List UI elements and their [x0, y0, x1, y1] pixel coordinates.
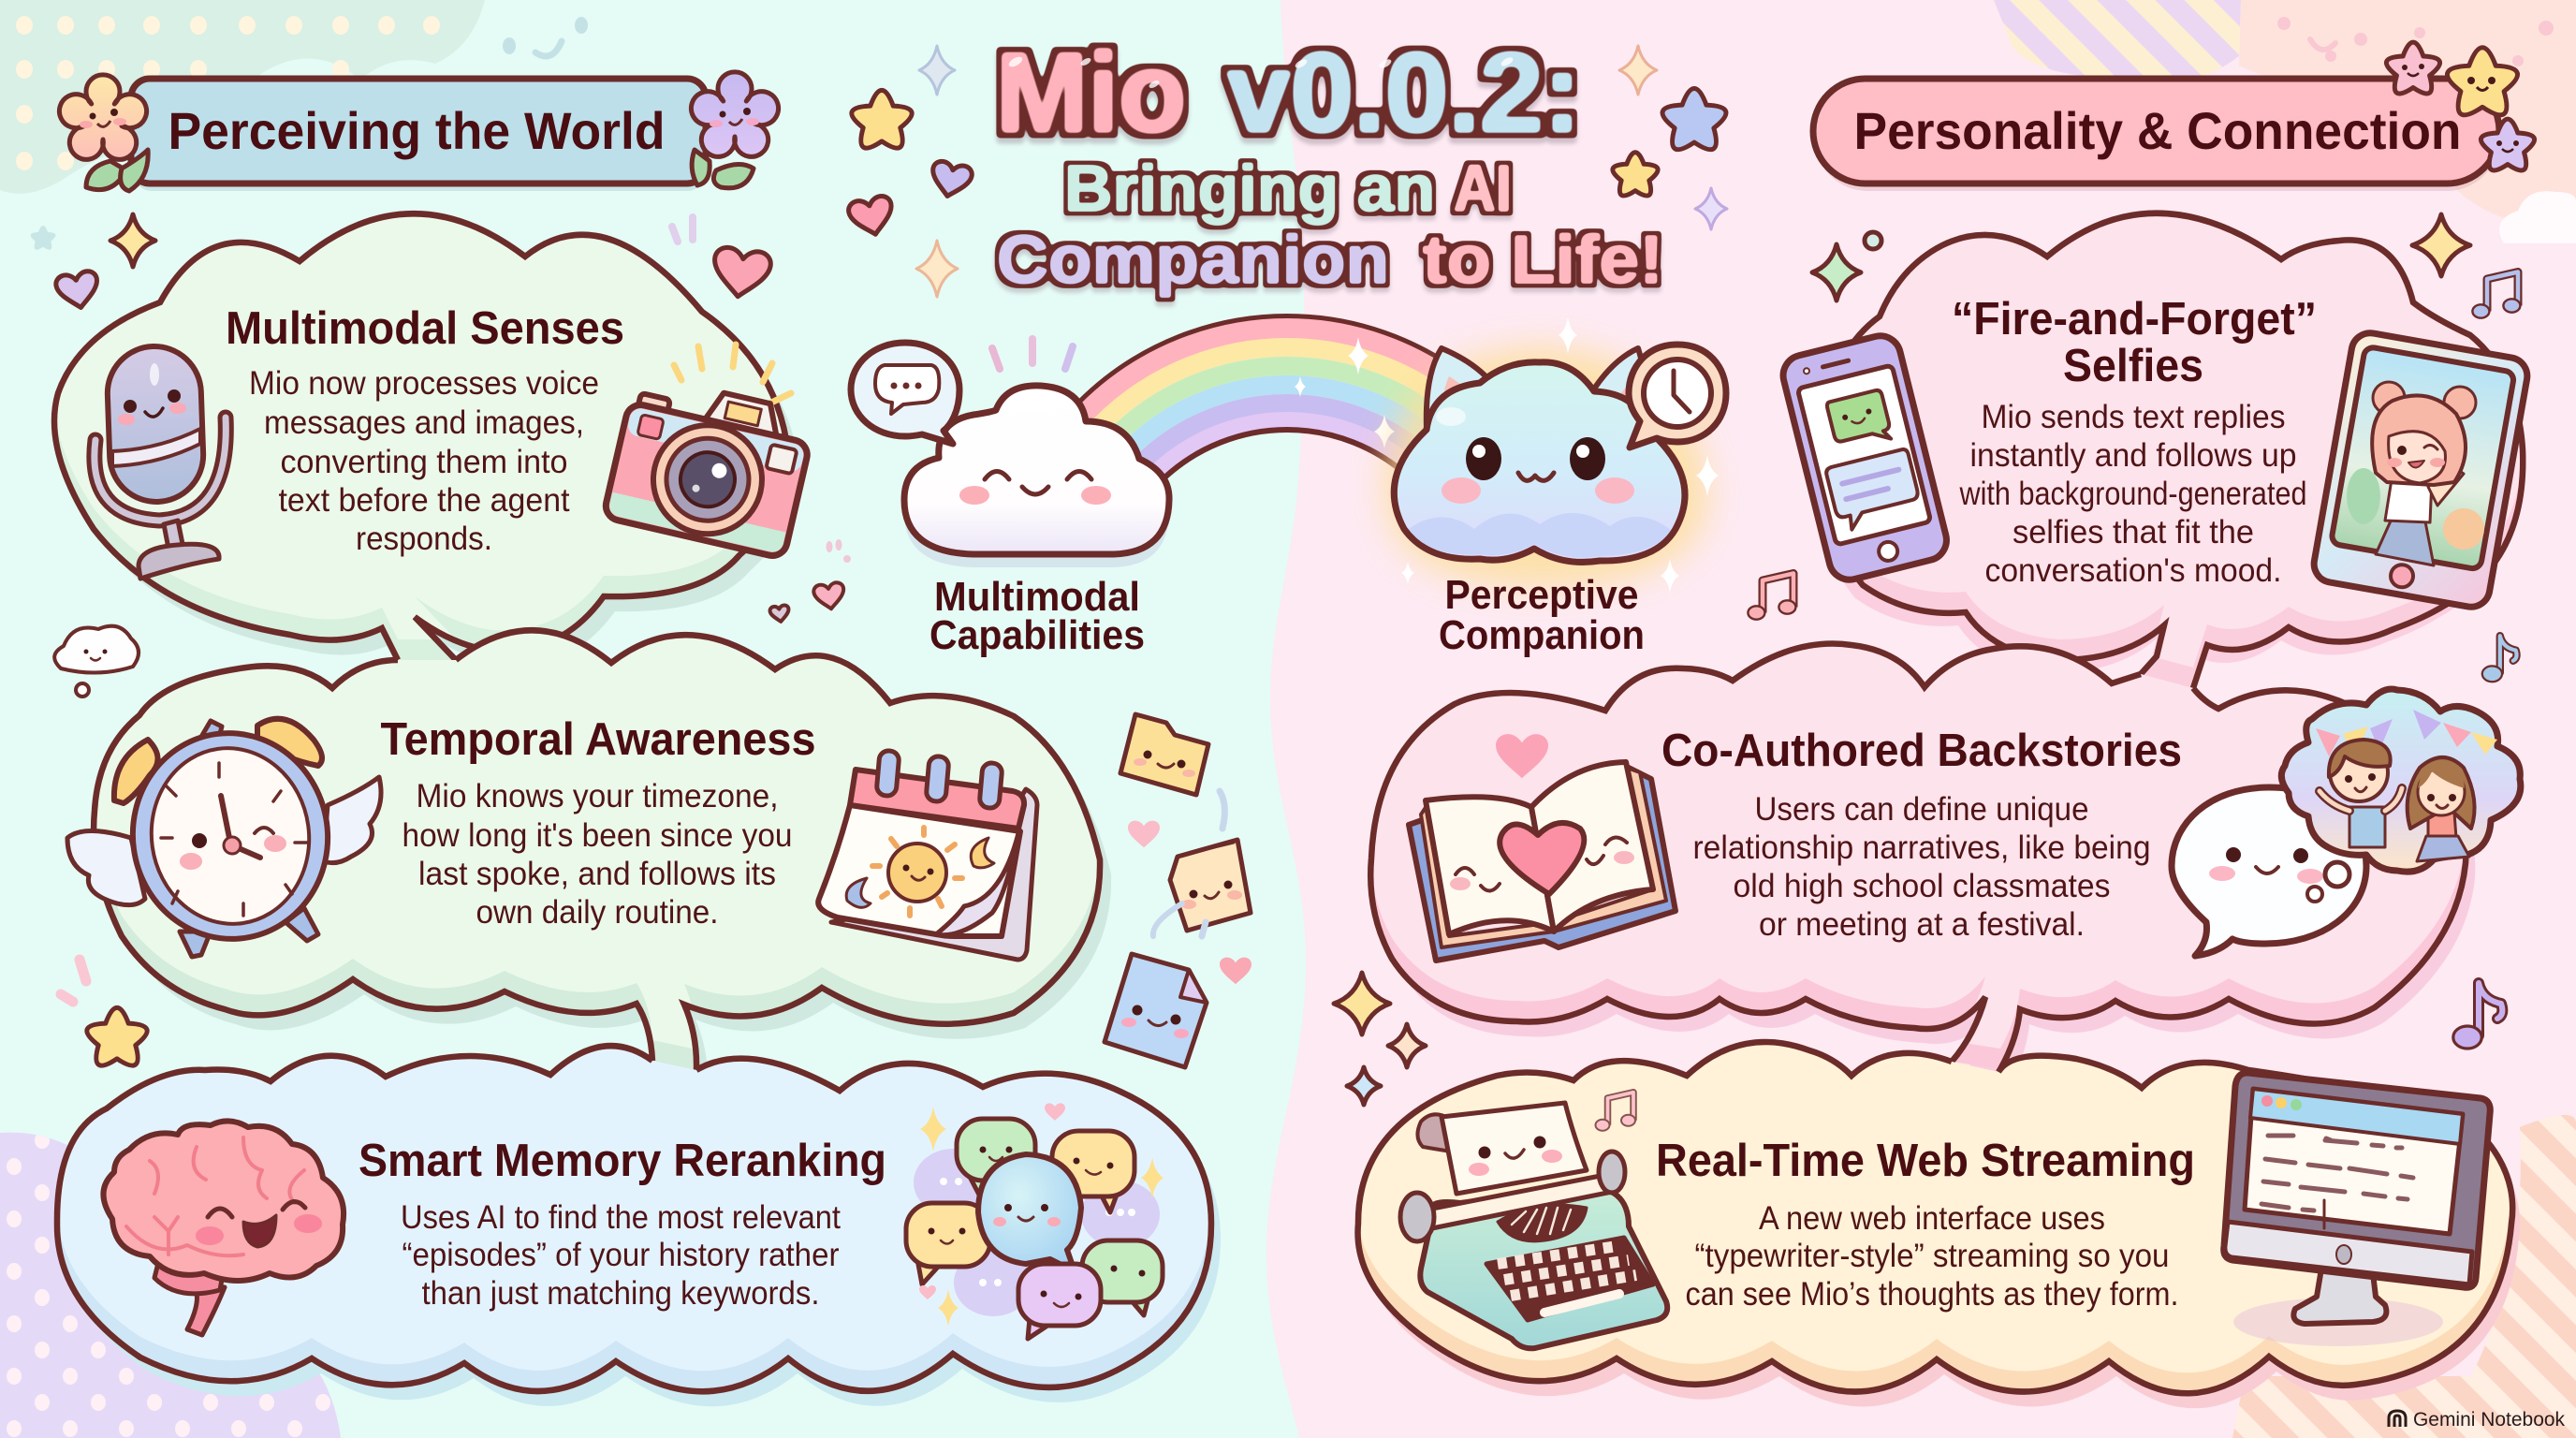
- body text: than just matching keywords.: [421, 1275, 820, 1312]
- title: Mio v0.0.2: Mio: [996, 30, 1186, 155]
- body text: “episodes” of your history rather: [402, 1237, 840, 1273]
- icon: pink star: [2386, 42, 2440, 94]
- decorations: left side: [31, 214, 851, 1065]
- body text: “typewriter-style” streaming so you: [1694, 1238, 2170, 1274]
- header: Perceiving the World: Perceiving the World: [168, 101, 665, 160]
- label: Multimodal Capabilities: Capabilities: [929, 612, 1145, 658]
- title: subtitle lines: Bringing an: [1064, 152, 1435, 225]
- bubble shape: [54, 193, 798, 675]
- bubble shape: [1813, 193, 2523, 701]
- label: Perceptive Companion: Perceptive: [1445, 572, 1638, 618]
- icon: calendar: [818, 750, 1037, 960]
- panel: Co-Authored Backstories: [1370, 624, 2521, 1084]
- header: Perceiving the World: [59, 72, 779, 191]
- icon: yellow folder: [1120, 714, 1208, 795]
- icon: camera: [603, 345, 817, 559]
- body text: [401, 1199, 841, 1312]
- icon: microphone: [95, 345, 226, 579]
- title: Mio v0.0.2: v0.0.2:: [1227, 30, 1581, 155]
- icon: festival thought cloud: [2281, 689, 2521, 872]
- body text: relationship narratives, like being: [1692, 829, 2151, 866]
- panel: Multimodal Senses: [54, 193, 817, 675]
- icon: open storybook: [1409, 734, 1676, 961]
- background blob: bottom left dots: [0, 1133, 341, 1438]
- heading: Temporal Awareness: [380, 714, 816, 765]
- heading: Real-Time Web Streaming: [1656, 1136, 2195, 1186]
- body text: own daily routine.: [476, 894, 719, 931]
- icon: brain: [103, 1121, 344, 1335]
- header: Personality & Connection: [1813, 42, 2535, 191]
- body text: how long it's been since you: [402, 817, 792, 854]
- icon: peach folder: [1170, 840, 1251, 931]
- panel: Temporal Awareness: [67, 609, 1111, 1085]
- title: subtitle lines: Companion: [997, 223, 1389, 298]
- icon: chat bubble cluster: [906, 1103, 1164, 1339]
- icon: clock bubble: [1629, 345, 1726, 448]
- body text: instantly and follows up: [1969, 437, 2297, 474]
- heading: Smart Memory Reranking: [359, 1136, 886, 1186]
- decorations: title stars and hearts: [847, 46, 1727, 297]
- title: subtitle lines: [997, 152, 1663, 298]
- body text: [1959, 399, 2306, 589]
- watermark: Gemini Notebook: Gemini Notebook: [2413, 1409, 2565, 1431]
- icon: right flower: [691, 72, 779, 188]
- background blob: top left dots: [0, 0, 485, 194]
- body text: or meeting at a festival.: [1759, 906, 2085, 943]
- rainbow sparkles: [1295, 337, 1395, 448]
- panel: Smart Memory Reranking: [57, 1025, 1221, 1406]
- label: Multimodal Capabilities: [929, 574, 1145, 658]
- body text: conversation's mood.: [1984, 552, 2282, 589]
- body text: [249, 365, 599, 557]
- heading: Multimodal Senses: [226, 303, 624, 354]
- icon: white speech bubble: [2172, 787, 2366, 956]
- title: Mio v0.0.2: [996, 30, 1581, 155]
- emphasis dashes: [992, 339, 1073, 369]
- icon: lavender star: [2481, 119, 2535, 170]
- body text: old high school classmates: [1734, 868, 2110, 904]
- body text: converting them into: [281, 444, 567, 480]
- body text: Mio sends text replies: [1981, 399, 2286, 435]
- icon: tablet with selfie: [2311, 330, 2530, 609]
- body text: [1692, 791, 2151, 943]
- decorations: right side sparkles and notes: [1334, 214, 2520, 1105]
- body text: with background-generated: [1959, 476, 2306, 512]
- body text: A new web interface uses: [1759, 1200, 2105, 1237]
- body text: Mio now processes voice: [249, 365, 599, 402]
- icon: winged alarm clock: [67, 719, 381, 957]
- icon: chat speech bubble: [851, 343, 959, 444]
- sparkles: [1401, 316, 1719, 593]
- label: Perceptive Companion: Companion: [1439, 612, 1645, 658]
- icon: yellow star: [2447, 48, 2518, 115]
- decoration: pink music note in typewriter panel: [1595, 1093, 1635, 1131]
- background: faint smile top left: [503, 17, 588, 56]
- heading: Selfies: [2063, 341, 2203, 391]
- background blob: top right peach: [2239, 0, 2576, 243]
- header: Personality & Connection: Personality & Connection: [1853, 101, 2462, 160]
- label: Multimodal Capabilities: Multimodal: [934, 574, 1140, 620]
- title: subtitle lines: AI: [1454, 152, 1512, 225]
- bubble shape: [1370, 624, 2475, 1084]
- character: Multimodal cloud: [851, 339, 1169, 567]
- body text: selfies that fit the: [2012, 514, 2254, 550]
- rainbow arc: [1079, 314, 1436, 479]
- icon: typewriter: [1400, 1103, 1667, 1348]
- background blob: bottom right stripes: [2232, 1115, 2576, 1438]
- body text: Mio knows your timezone,: [416, 778, 779, 814]
- decorations: folders and files: [1105, 714, 1251, 1067]
- body text: [1685, 1200, 2179, 1313]
- panel: Real-Time Web Streaming: [1358, 1021, 2520, 1408]
- heading: “Fire-and-Forget”: [1952, 294, 2317, 345]
- background: pink right wave: [1266, 0, 2576, 1438]
- bubble shape: [1358, 1021, 2520, 1408]
- icon: phone: [1778, 331, 1951, 584]
- label: Perceptive Companion: [1439, 572, 1645, 658]
- body text: Users can define unique: [1754, 791, 2089, 828]
- body text: messages and images,: [264, 404, 584, 441]
- icon: blue document: [1105, 954, 1207, 1067]
- heading: [1952, 294, 2317, 391]
- body text: last spoke, and follows its: [418, 856, 776, 892]
- illustration: selfie girl: [2347, 382, 2484, 565]
- title: subtitle lines: to Life!: [1423, 223, 1663, 298]
- heading: Co-Authored Backstories: [1661, 726, 2182, 776]
- bubble shape: [94, 609, 1111, 1085]
- body text: responds.: [356, 521, 492, 557]
- body text: text before the agent: [279, 482, 570, 519]
- title highlights: [1007, 55, 1515, 90]
- body text: [402, 778, 792, 931]
- body text: Uses AI to find the most relevant: [401, 1199, 841, 1236]
- bubble shape: [57, 1025, 1221, 1406]
- icon: desktop monitor: [2224, 1073, 2490, 1346]
- body text: can see Mio’s thoughts as they form.: [1685, 1276, 2179, 1313]
- background blob: top right stripes: [1994, 0, 2241, 82]
- character: Perceptive cloud: [1385, 316, 1726, 593]
- icon: left flower: [59, 75, 148, 191]
- panel: Fire-and-Forget Selfies: [1778, 193, 2530, 701]
